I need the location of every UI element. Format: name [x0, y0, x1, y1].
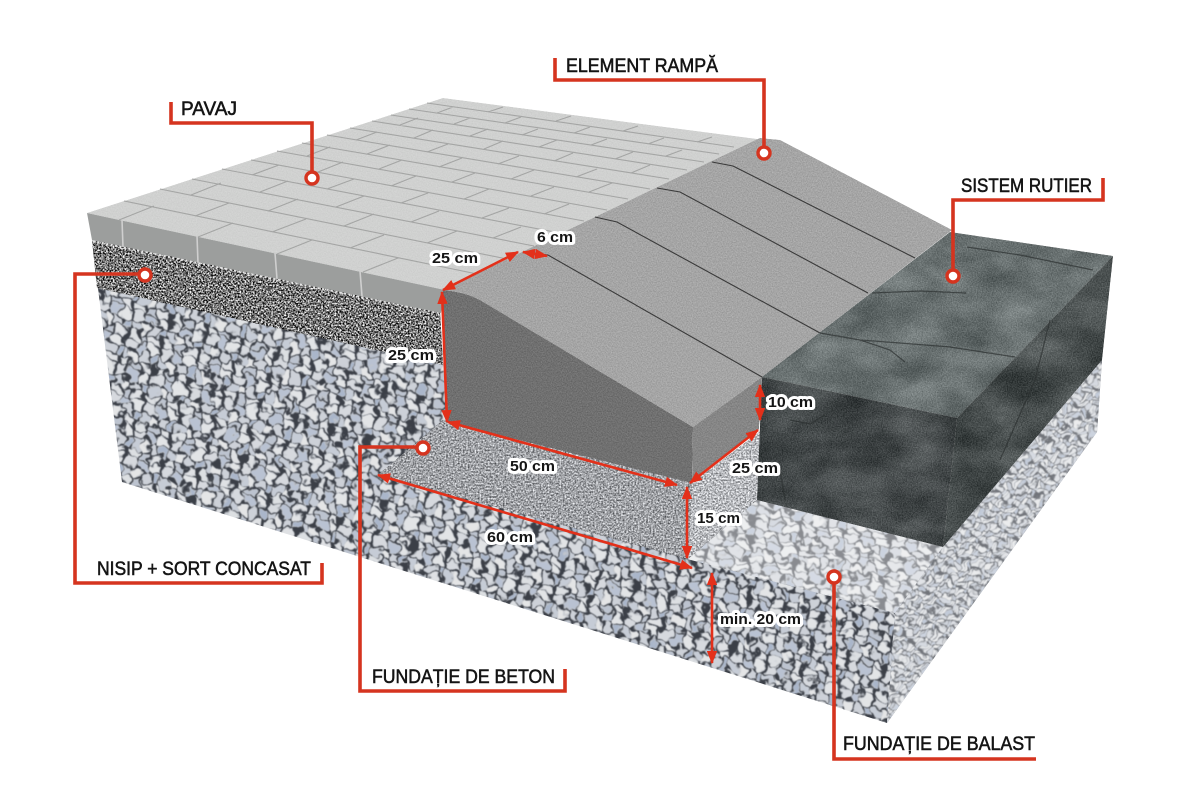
dimension labels: 15 cm: [697, 510, 740, 527]
label: FUNDAȚIE DE BALAST: FUNDAȚIE DE BALAST: [843, 734, 1035, 755]
ballast right side: [887, 360, 1102, 723]
dimension labels: 25 cm: [732, 460, 778, 477]
label: NISIP + SORT CONCASAT: [75, 269, 322, 583]
label: NISIP + SORT CONCASAT: NISIP + SORT CONCASAT: [97, 559, 311, 580]
dimension labels: min. 20 cm: [720, 611, 801, 628]
ramp side face: [443, 290, 693, 483]
crushed stone front face: [92, 240, 895, 723]
asphalt left face: [757, 377, 957, 547]
ramp joints: [523, 162, 915, 377]
paver top: [87, 98, 780, 290]
asphalt cracks: [780, 247, 1093, 500]
label: FUNDAȚIE DE BETON: [360, 442, 565, 691]
dimension labels: [388, 229, 813, 628]
dimension labels: 25 cm: [432, 250, 478, 267]
dimension arrows: [378, 252, 760, 663]
ballast top surface: [687, 500, 943, 613]
label: ELEMENT RAMPĂ: ELEMENT RAMPĂ: [566, 56, 718, 77]
paver front joints: [122, 220, 362, 296]
road system asphalt block: [757, 232, 1113, 547]
label: FUNDAȚIE DE BETON: FUNDAȚIE DE BETON: [372, 667, 555, 688]
label: ELEMENT RAMPĂ: [555, 56, 770, 159]
label: PAVAJ: [171, 99, 318, 184]
asphalt right face: [943, 256, 1113, 547]
label: FUNDAȚIE DE BALAST: [828, 571, 1036, 759]
asphalt top: [762, 232, 1113, 418]
ballast foundation layer: [92, 240, 1102, 723]
sand and crushed aggregate layer: [92, 240, 443, 365]
concrete foundation: [378, 420, 762, 559]
dimension labels: 50 cm: [510, 458, 555, 475]
dimension labels: 10 cm: [768, 394, 813, 411]
label: SISTEM RUTIER: SISTEM RUTIER: [961, 176, 1092, 197]
label: PAVAJ: PAVAJ: [181, 99, 237, 120]
paving surface: [87, 98, 780, 313]
dimension labels: 25 cm: [388, 347, 434, 364]
dimension labels: 60 cm: [487, 529, 533, 546]
paver joints: [119, 103, 734, 274]
paver front face: [87, 213, 445, 313]
sand top crust: [93, 241, 440, 313]
dimension labels: 6 cm: [537, 229, 573, 246]
label: SISTEM RUTIER: [947, 176, 1103, 282]
ramp element: [443, 138, 952, 483]
ramp sloped top: [443, 138, 952, 427]
ramp end face: [692, 377, 762, 483]
